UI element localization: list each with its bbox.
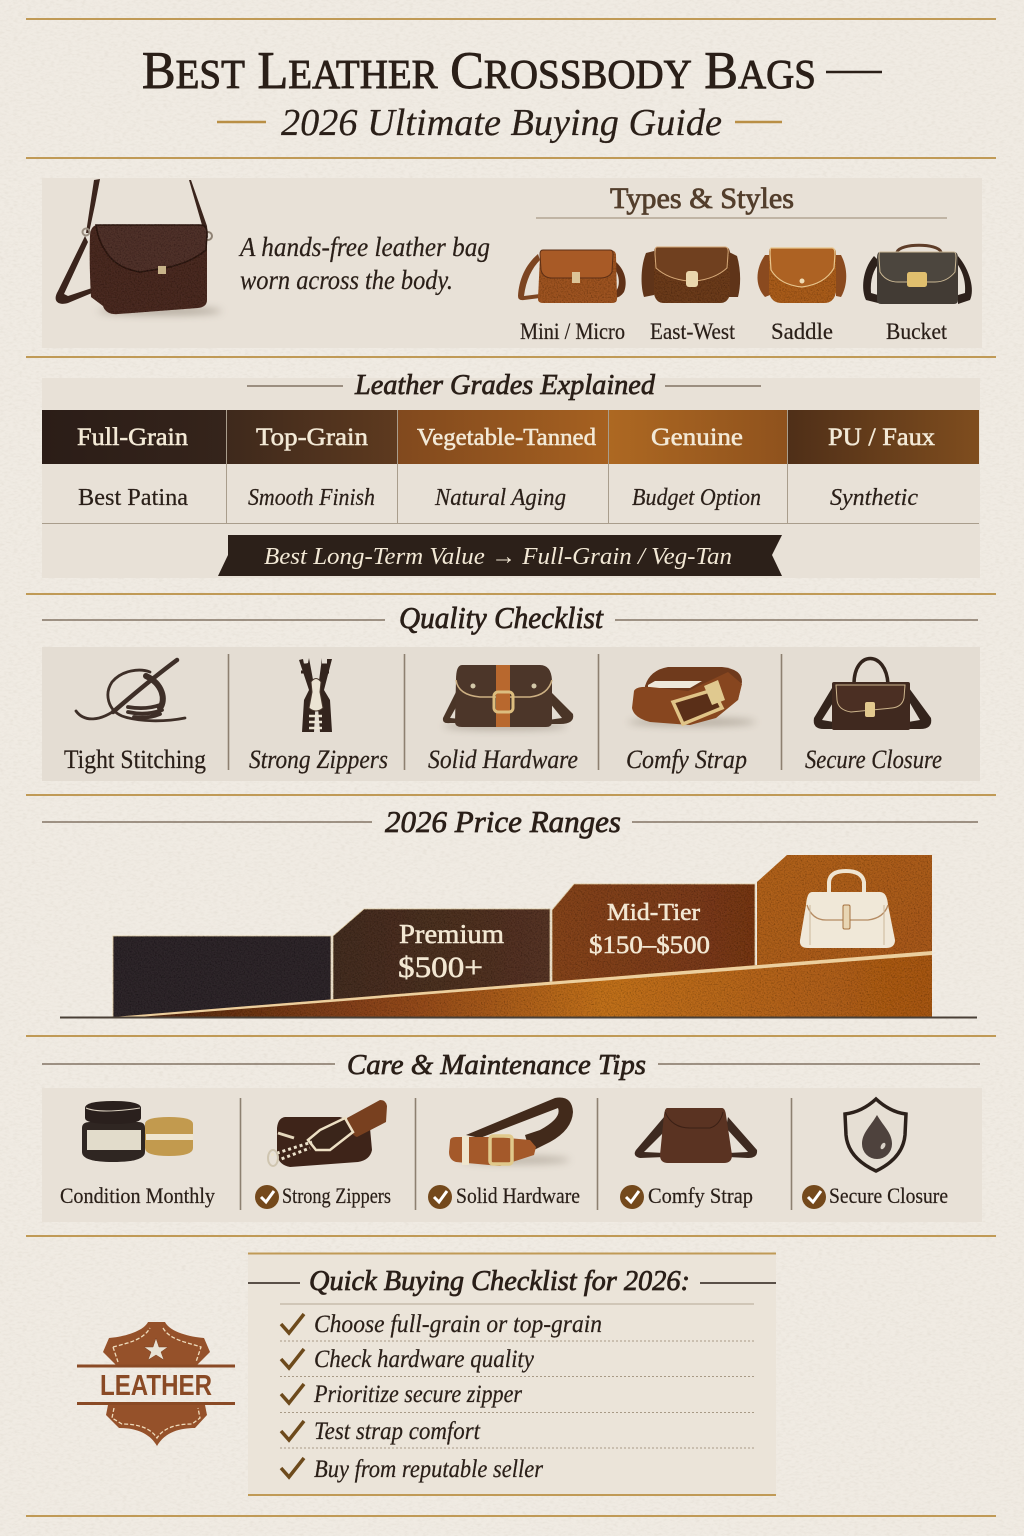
value banner (218, 535, 782, 576)
tip: secure closure: Secure Closure (829, 1183, 948, 1208)
heading: quick checklist: Quick Buying Checklist for 2026: (309, 1266, 690, 1297)
item: tight stitching: Tight Stitching (64, 745, 206, 774)
grade: pu faux: PU / Faux (828, 424, 936, 451)
type: mini micro: Mini / Micro (520, 319, 625, 344)
leather badge logo (77, 1322, 235, 1446)
tip: strong zippers: Strong Zippers (282, 1183, 391, 1208)
grade: vegetable-tanned: Natural Aging (434, 485, 566, 511)
icon: white bag (800, 871, 895, 948)
intro text: worn across the body. (240, 265, 453, 295)
check badge (620, 1185, 644, 1209)
title: BEST LEATHER CROSSBODY BAGS (142, 42, 816, 100)
intro text: A hands-free leather bag (238, 232, 490, 262)
check badge (802, 1185, 826, 1209)
grade: genuine: Genuine (651, 424, 743, 451)
grade: full-grain: Full-Grain (77, 424, 189, 451)
heading: types and styles: Types & Styles (610, 182, 794, 215)
type: bucket (863, 245, 972, 344)
check item 2: Check hardware quality (314, 1346, 535, 1373)
tip: condition monthly (60, 1101, 215, 1208)
panel: quick buying checklist (248, 1253, 776, 1496)
grade: genuine: Budget Option (632, 485, 761, 511)
grade: full-grain (42, 410, 226, 511)
tip: secure closure (802, 1099, 948, 1209)
heading: leather grades: Leather Grades Explained (354, 369, 655, 401)
type: east-west: East-West (650, 319, 736, 344)
tip: comfy strap (620, 1108, 757, 1209)
heading: price ranges: 2026 Price Ranges (385, 804, 621, 839)
tip: solid hardware: Solid Hardware (456, 1183, 580, 1208)
price step: premium (333, 909, 550, 1017)
panel: intro and types (42, 178, 982, 348)
grade: top-grain: Smooth Finish (248, 485, 375, 511)
item: strong zippers (249, 658, 388, 774)
tip: strong zippers (255, 1100, 391, 1209)
item: solid hardware: Solid Hardware (428, 745, 578, 774)
price step: mid-tier: $150–$500 (589, 932, 710, 959)
type: saddle: Saddle (771, 319, 833, 344)
grade: full-grain: Best Patina (78, 485, 188, 511)
grade: vegetable-tanned: Vegetable-Tanned (417, 425, 596, 451)
check item 1: Choose full-grain or top-grain (314, 1311, 602, 1338)
panel: price ranges (42, 804, 978, 1018)
heading: quality checklist: Quality Checklist (399, 600, 604, 635)
price step: mid-tier: Mid-Tier (607, 900, 700, 926)
tip: solid hardware (428, 1098, 580, 1209)
item: secure closure: Secure Closure (805, 745, 942, 774)
check badge (255, 1185, 279, 1209)
price step: entry with bag icon (757, 855, 932, 1017)
panel: care and maintenance (42, 1049, 982, 1222)
grade: pu faux (788, 410, 979, 511)
type: east-west (642, 247, 740, 344)
item: tight stitching (64, 660, 206, 774)
tip: condition monthly: Condition Monthly (60, 1183, 215, 1208)
item: strong zippers: Strong Zippers (249, 745, 388, 774)
grade: top-grain (227, 410, 397, 511)
item: comfy strap (626, 667, 756, 774)
check item 3: Prioritize secure zipper (313, 1381, 522, 1408)
leather badge logo: LEATHER (100, 1370, 212, 1402)
type: mini micro (518, 250, 626, 344)
value banner: Best Long-Term Value → Full-Grain / Veg-Tan (264, 544, 732, 570)
panel: leather grades (42, 369, 980, 578)
grade: pu faux: Synthetic (830, 485, 918, 511)
check badge (428, 1185, 452, 1209)
icon: main crossbody bag (56, 179, 222, 315)
type: saddle (757, 248, 846, 344)
item: secure closure (805, 658, 942, 774)
price wedge (113, 951, 932, 1017)
price step: mid-tier (552, 884, 755, 1017)
check item 5: Buy from reputable seller (314, 1456, 543, 1483)
subtitle: 2026 Ultimate Buying Guide (281, 102, 722, 144)
panel: quality checklist (42, 600, 980, 781)
price step: premium: Premium (399, 919, 504, 949)
grade: genuine (609, 410, 787, 511)
price step: luxury (113, 936, 331, 1017)
heading: care tips: Care & Maintenance Tips (347, 1049, 646, 1081)
item: comfy strap: Comfy Strap (626, 745, 747, 774)
grade: vegetable-tanned (398, 410, 608, 511)
check item 4: Test strap comfort (314, 1418, 481, 1445)
price step: premium: $500+ (398, 951, 483, 984)
tip: comfy strap: Comfy Strap (648, 1183, 753, 1208)
type: bucket: Bucket (886, 319, 948, 344)
grade: top-grain: Top-Grain (256, 424, 369, 451)
item: solid hardware (428, 665, 578, 774)
